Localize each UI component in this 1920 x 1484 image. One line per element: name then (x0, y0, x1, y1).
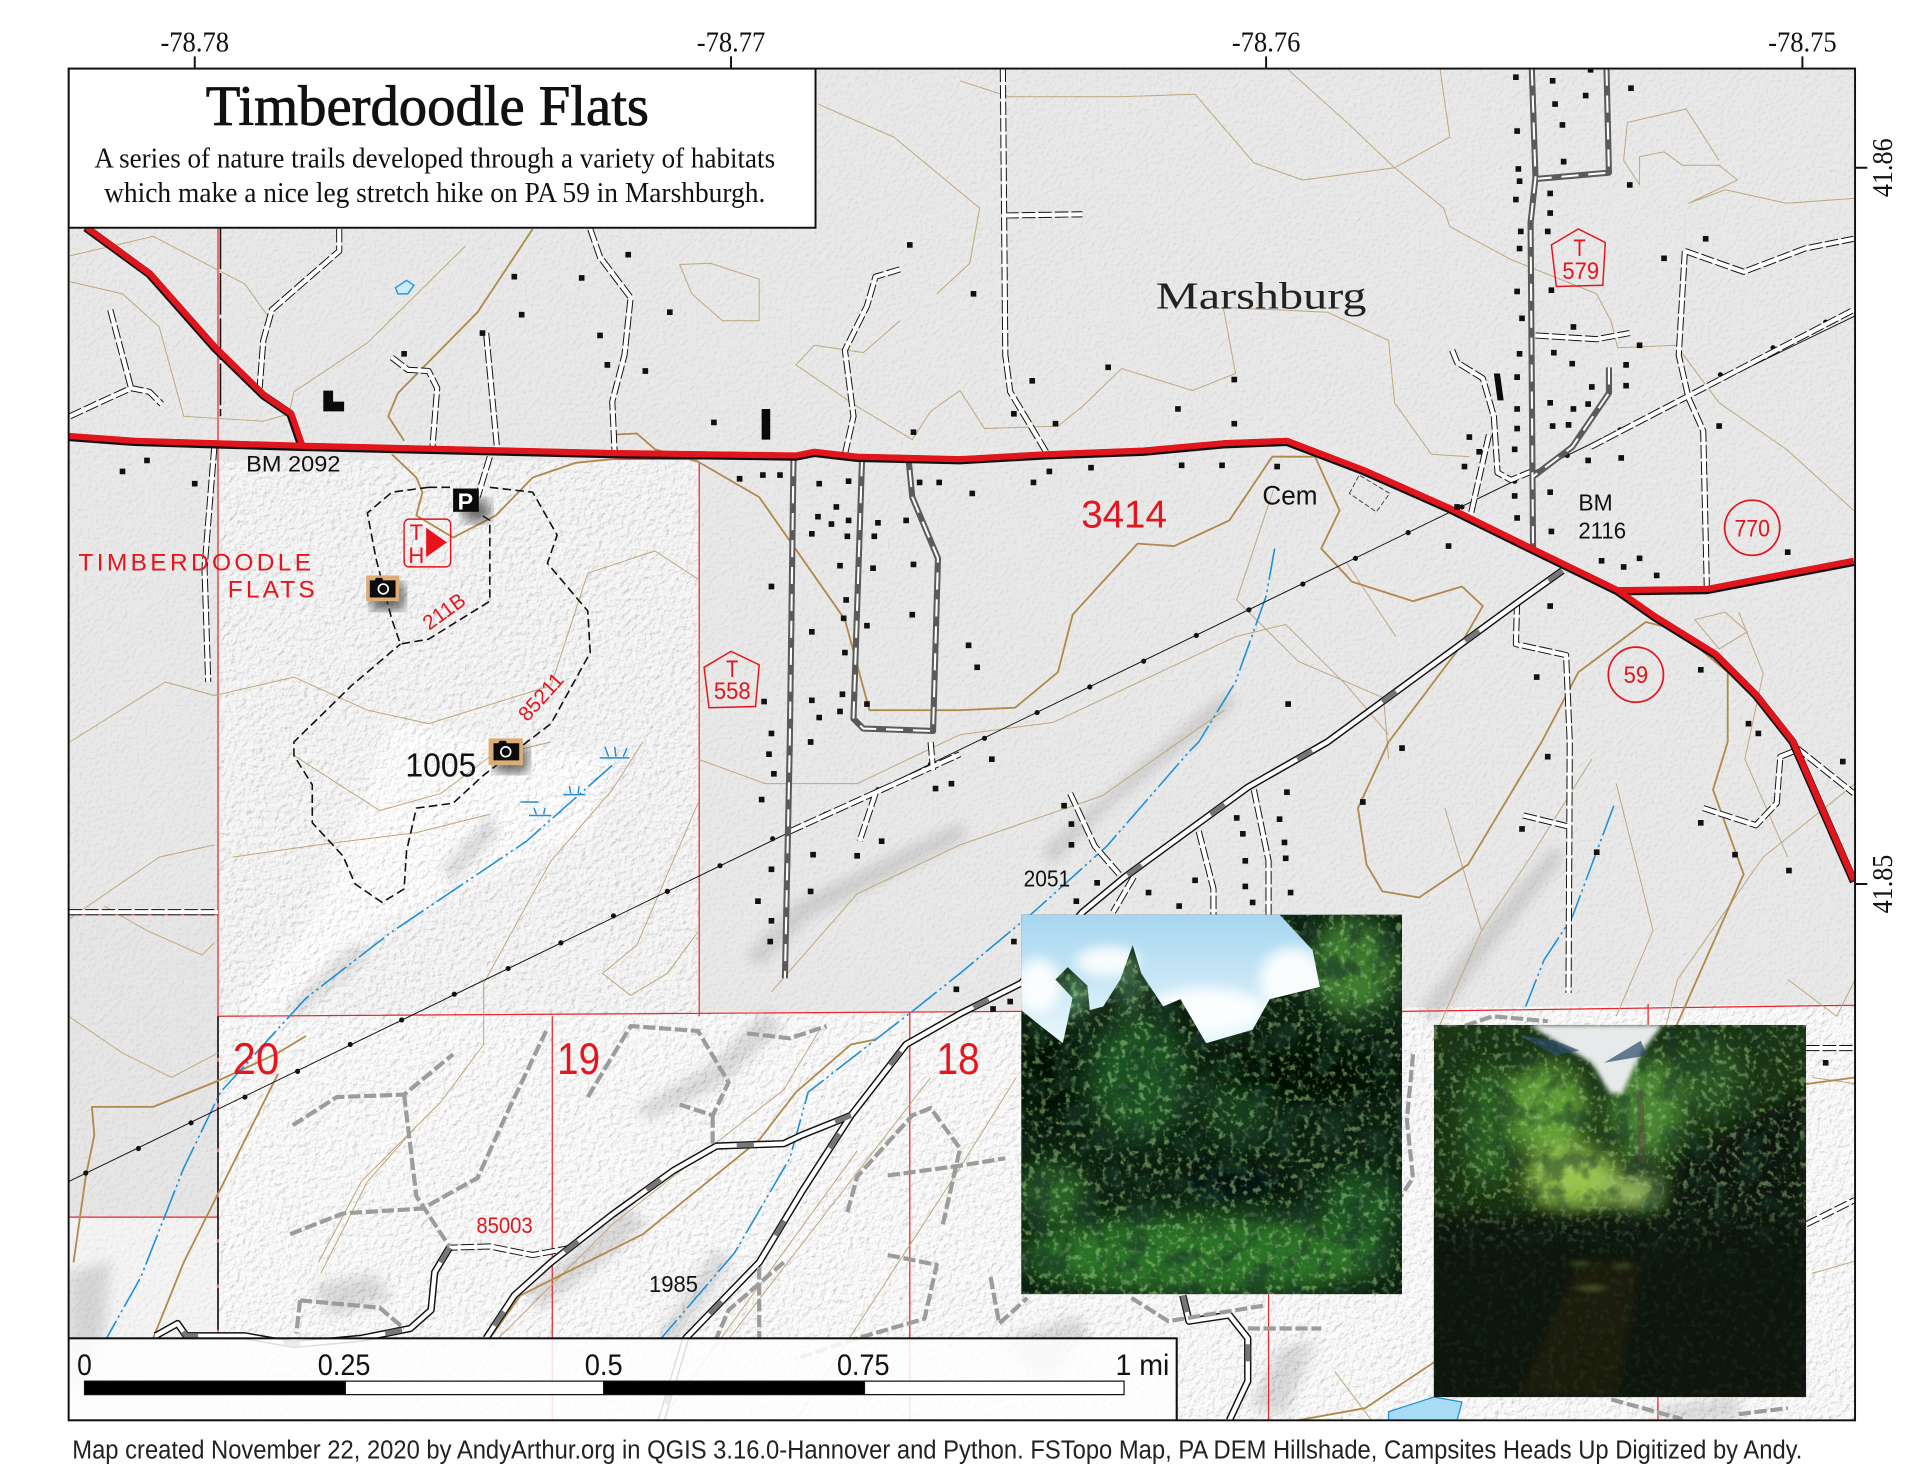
forest trails (290, 1016, 1788, 1419)
gray roads (785, 69, 1609, 978)
highway PA 59 (69, 228, 1854, 882)
route label 211B: 211B (419, 589, 470, 635)
marsh symbols (520, 747, 629, 815)
shield T 558: 558 (714, 678, 751, 705)
index contour lines (74, 229, 1855, 1420)
streams (107, 549, 1614, 1338)
longitude axis: -78.77 (697, 27, 765, 58)
icon: trailhead: H (408, 543, 424, 568)
route label 85211: 85211 (514, 669, 569, 726)
scale labels: 0.25 (318, 1349, 370, 1382)
icon: camera two (489, 738, 528, 773)
shield T 558 (704, 651, 759, 708)
latitude axis: 41.86 (1868, 138, 1899, 197)
longitude axis: -78.78 (160, 27, 229, 58)
photo: grassy trail (1427, 1025, 1806, 1401)
red section lines (69, 228, 1855, 1420)
title panel (69, 69, 816, 228)
icon: parking (453, 488, 491, 523)
route marker 59: 59 (1624, 662, 1648, 689)
description: which make a nice leg stretch hike on PA 59 in Marshburgh. (104, 178, 765, 209)
unpaved roads (69, 69, 1855, 1255)
elevation 1005: 1005 (405, 747, 476, 784)
icon: camera one (366, 575, 404, 610)
longitude axis: -78.76 (1232, 27, 1300, 58)
elevation 2051: 2051 (1024, 865, 1070, 891)
section line black boundary (217, 228, 222, 1330)
large buildings (323, 373, 1504, 440)
scale bar panel (69, 1338, 1177, 1420)
shield T 579: 579 (1562, 258, 1599, 285)
label Cem: Cem (1262, 480, 1318, 510)
scale labels (77, 1349, 1169, 1382)
scale labels: 0.5 (585, 1349, 623, 1382)
shield T 579: T (1573, 235, 1586, 262)
area label Timberdoodle Flats: TIMBERDOODLE (78, 550, 311, 577)
power line (69, 316, 1855, 1182)
icon: trailhead: T (410, 520, 423, 545)
place name Marshburg: Marshburg (1156, 276, 1367, 318)
section numbers: 19 (557, 1035, 600, 1084)
improved roads (156, 571, 1562, 1420)
label 3414: 3414 (1081, 494, 1167, 537)
icon: parking: P (458, 488, 473, 514)
scale bar segments (85, 1381, 1124, 1395)
scale labels: 0 (77, 1349, 92, 1382)
shield T 558: T (726, 656, 738, 683)
area label Timberdoodle Flats: FLATS (228, 577, 315, 604)
section numbers: 18 (937, 1035, 980, 1084)
route marker 770 (1725, 500, 1780, 555)
title: Timberdoodle Flats (206, 75, 649, 138)
section numbers: 20 (233, 1035, 279, 1084)
pond (1389, 1397, 1462, 1420)
benchmark 2116: BM (1578, 490, 1613, 516)
description: A series of nature trails developed through a variety of habitats (94, 144, 775, 175)
longitude axis (160, 27, 1837, 69)
route marker 59 (1608, 647, 1663, 702)
map labels (78, 276, 1626, 1297)
cemetery outline (1349, 475, 1390, 512)
elevation 1985: 1985 (649, 1271, 698, 1297)
benchmark 2092: BM 2092 (246, 451, 340, 476)
route label 85003: 85003 (476, 1213, 533, 1238)
photo: forest and sky (1016, 915, 1402, 1294)
route marker 770: 770 (1734, 515, 1770, 542)
buildings (122, 70, 1843, 1063)
benchmark 2116: 2116 (1578, 518, 1626, 544)
small pond (396, 280, 414, 294)
scale labels: 0.75 (837, 1349, 890, 1382)
longitude axis: -78.75 (1768, 27, 1837, 58)
latitude axis (1855, 138, 1899, 913)
footer credit: Map created November 22, 2020 by AndyArthur.org in QGIS 3.16.0-Hannover and Python. FSTopo Map, PA DEM Hillshade, Campsites Heads Up Digitized by Andy. (72, 1436, 1802, 1464)
shield T 579 (1551, 229, 1605, 287)
icon: trailhead (404, 519, 451, 568)
hiking trail (294, 487, 590, 902)
latitude axis: 41.85 (1868, 855, 1899, 913)
scale labels: 1 mi (1116, 1349, 1169, 1382)
